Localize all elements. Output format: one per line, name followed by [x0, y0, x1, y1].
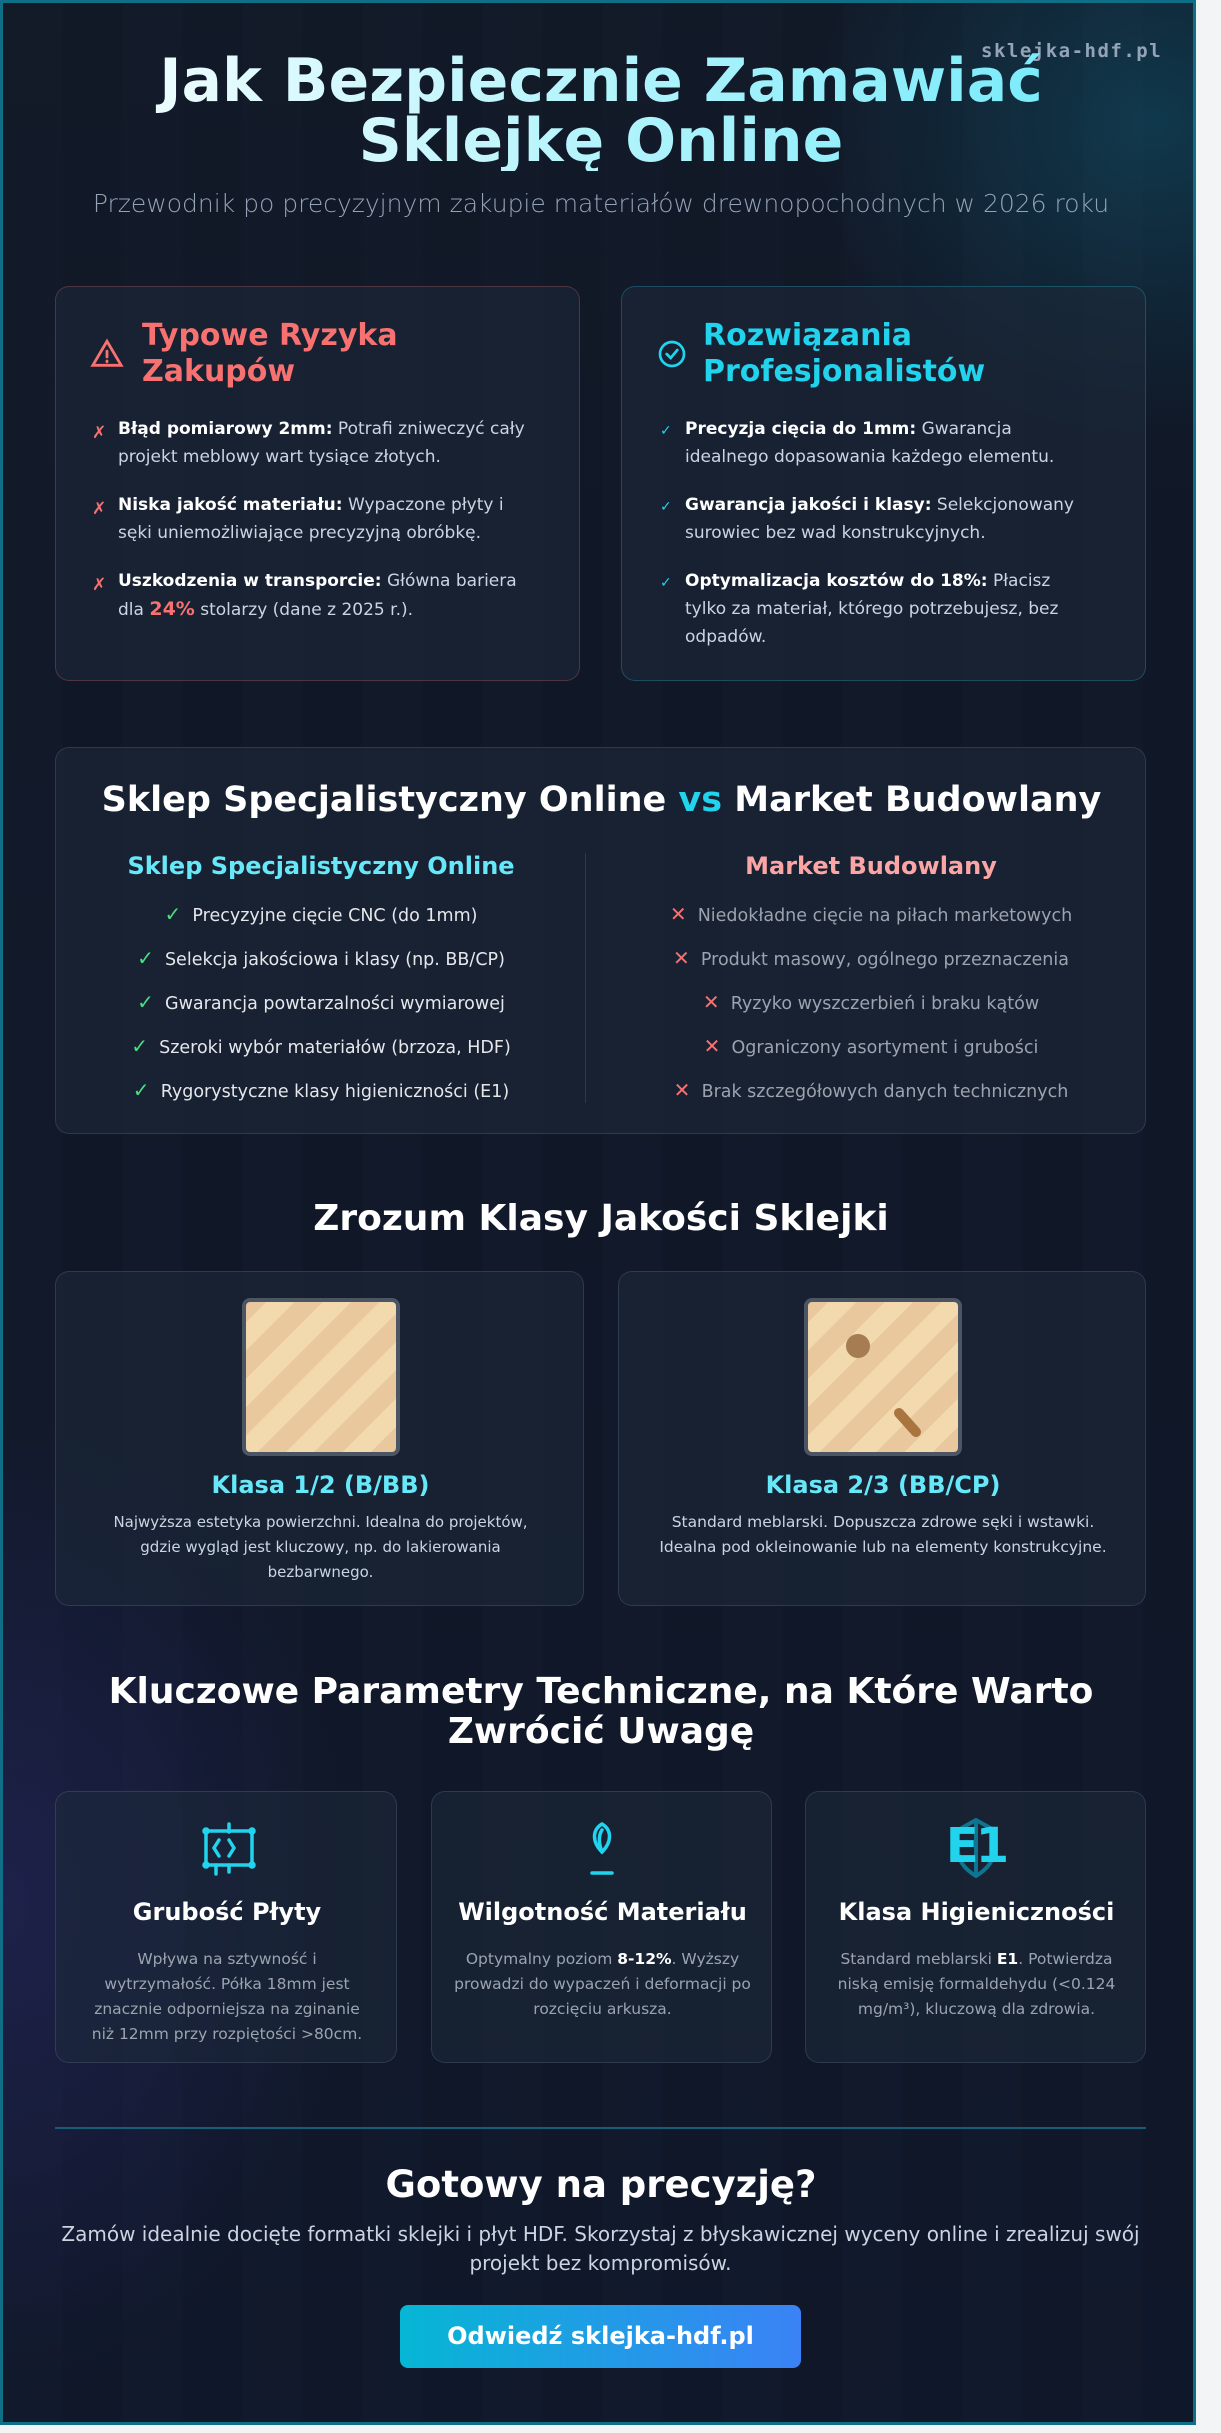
icon: plywood with knots	[804, 1298, 962, 1456]
column: online shop: ✓ Gwarancja powtarzalności wymiarowej	[137, 990, 505, 1014]
heading: technical parameters: Kluczowe Parametry Techniczne, na Które Warto Zwrócić Uwagę	[109, 1671, 1093, 1752]
column: market: ✕ Produkt masowy, ogólnego przeznaczenia	[673, 946, 1069, 970]
card: class 2/3	[618, 1271, 1146, 1606]
column: market: ✕ Niedokładne cięcie na piłach marketowych	[670, 902, 1072, 926]
risk items: Uszkodzenia w transporcie: Główna bariera dla 24% stolarzy (dane z 2025 r.).	[118, 571, 517, 620]
title	[3, 51, 1199, 171]
card: moisture	[431, 1791, 772, 2063]
heading: solutions: Profesjonalistów	[703, 354, 985, 389]
card: hygiene	[805, 1791, 1146, 2063]
card: thickness	[55, 1791, 397, 2063]
card: class 1/2	[55, 1271, 584, 1606]
panel: risks	[55, 286, 580, 681]
heading: solutions	[703, 318, 985, 389]
icon: clean plywood	[242, 1298, 400, 1456]
class title: Klasa 2/3 (BB/CP)	[766, 1471, 1000, 1499]
solution items: Gwarancja jakości i klasy: Selekcjonowany surowiec bez wad konstrukcyjnych.	[685, 495, 1074, 543]
icon: drop	[590, 1822, 614, 1875]
risk items: Niska jakość materiału: Wypaczone płyty i sęki uniemożliwiające precyzyjną obróbkę.	[118, 495, 504, 543]
column: online shop: Sklep Specjalistyczny Online	[127, 852, 515, 880]
param description: Wpływa na sztywność i wytrzymałość. Półka 18mm jest znacznie odporniejsza na zginanie niż 12mm przy rozpiętości >80cm.	[92, 1950, 362, 2043]
heading: quality classes: Zrozum Klasy Jakości Sklejki	[313, 1198, 889, 1239]
subtitle: Przewodnik po precyzyjnym zakupie materiałów drewnopochodnych w 2026 roku	[93, 189, 1109, 218]
column: market	[670, 852, 1072, 1102]
class description: Idealna pod okleinowanie lub na elementy konstrukcyjne.	[659, 1538, 1107, 1556]
heading: CTA: Gotowy na precyzję?	[386, 2163, 816, 2206]
comparison heading: Sklep Specjalistyczny Online vs Market Budowlany	[102, 780, 1101, 820]
watermark: sklejka-hdf.pl	[981, 40, 1162, 62]
risk items	[92, 419, 525, 620]
solution items	[660, 419, 1074, 647]
risk items: Błąd pomiarowy 2mm: Potrafi zniweczyć cały projekt meblowy wart tysiące złotych.	[118, 419, 525, 467]
CTA button: Odwiedź sklejka-hdf.pl	[447, 2322, 754, 2350]
solution items: ✓	[660, 499, 672, 515]
class title: Klasa 1/2 (B/BB)	[212, 1471, 429, 1499]
solution items: Precyzja cięcia do 1mm: Gwarancja idealnego dopasowania każdego elementu.	[685, 419, 1054, 467]
title: Jak Bezpiecznie Zamawiać	[159, 46, 1043, 116]
solution items: ✓	[660, 575, 672, 591]
panel: solutions	[621, 286, 1146, 681]
risk items: ✗	[92, 423, 106, 443]
heading: risks: Zakupów	[142, 354, 295, 389]
icon: warning	[90, 338, 124, 367]
solution items: ✓	[660, 423, 672, 439]
heading: risks	[142, 318, 398, 389]
column: market: ✕ Ograniczony asortyment i grubości	[704, 1034, 1038, 1058]
solution items: Optymalizacja kosztów do 18%: Płacisz tylko za materiał, którego potrzebujesz, bez odpadów.	[685, 571, 1058, 647]
icon: check circle	[658, 340, 686, 368]
column: online shop: ✓ Selekcja jakościowa i klasy (np. BB/CP)	[137, 946, 505, 970]
param title: Grubość Płyty	[133, 1898, 321, 1926]
class description: Najwyższa estetyka powierzchni. Idealna do projektów, gdzie wygląd jest kluczowy, np. do lakierowania bezbarwnego.	[113, 1513, 528, 1581]
title: Sklejkę Online	[359, 106, 843, 176]
icon: E1 shield: E1	[946, 1818, 1006, 1874]
column: market: Market Budowlany	[745, 852, 997, 880]
param title: Wilgotność Materiału	[458, 1898, 747, 1926]
class description: Standard meblarski. Dopuszcza zdrowe sęki i wstawki.	[672, 1513, 1094, 1531]
param title: Klasa Higieniczności	[839, 1898, 1114, 1926]
column: market: ✕ Ryzyko wyszczerbień i braku kątów	[703, 990, 1039, 1014]
column: market: ✕ Brak szczegółowych danych technicznych	[674, 1078, 1068, 1102]
risk items: ✗	[92, 499, 106, 519]
column: online shop: ✓ Precyzyjne cięcie CNC (do 1mm)	[165, 902, 477, 926]
risk items: ✗	[92, 575, 106, 595]
param description: Standard meblarski E1. Potwierdza niską emisję formaldehydu (<0.124 mg/m³), kluczową dla zdrowia.	[838, 1950, 1115, 2018]
heading: solutions: Rozwiązania	[703, 318, 912, 353]
class description	[659, 1513, 1107, 1556]
heading: risks: Typowe Ryzyka	[142, 318, 398, 353]
CTA button	[400, 2305, 801, 2368]
param description: Optymalny poziom 8-12%. Wyższy prowadzi do wypaczeń i deformacji po rozcięciu arkusza.	[454, 1950, 751, 2018]
panel: comparison	[55, 747, 1146, 1134]
icon: thickness	[202, 1822, 256, 1876]
column: online shop: ✓ Szeroki wybór materiałów (brzoza, HDF)	[131, 1034, 511, 1058]
column: online shop: ✓ Rygorystyczne klasy higieniczności (E1)	[133, 1078, 509, 1102]
column: online shop	[127, 852, 515, 1102]
CTA text: Zamów idealnie docięte formatki sklejki i płyt HDF. Skorzystaj z błyskawicznej wyceny online i zrealizuj swój projekt bez kompromisów.	[61, 2222, 1140, 2275]
